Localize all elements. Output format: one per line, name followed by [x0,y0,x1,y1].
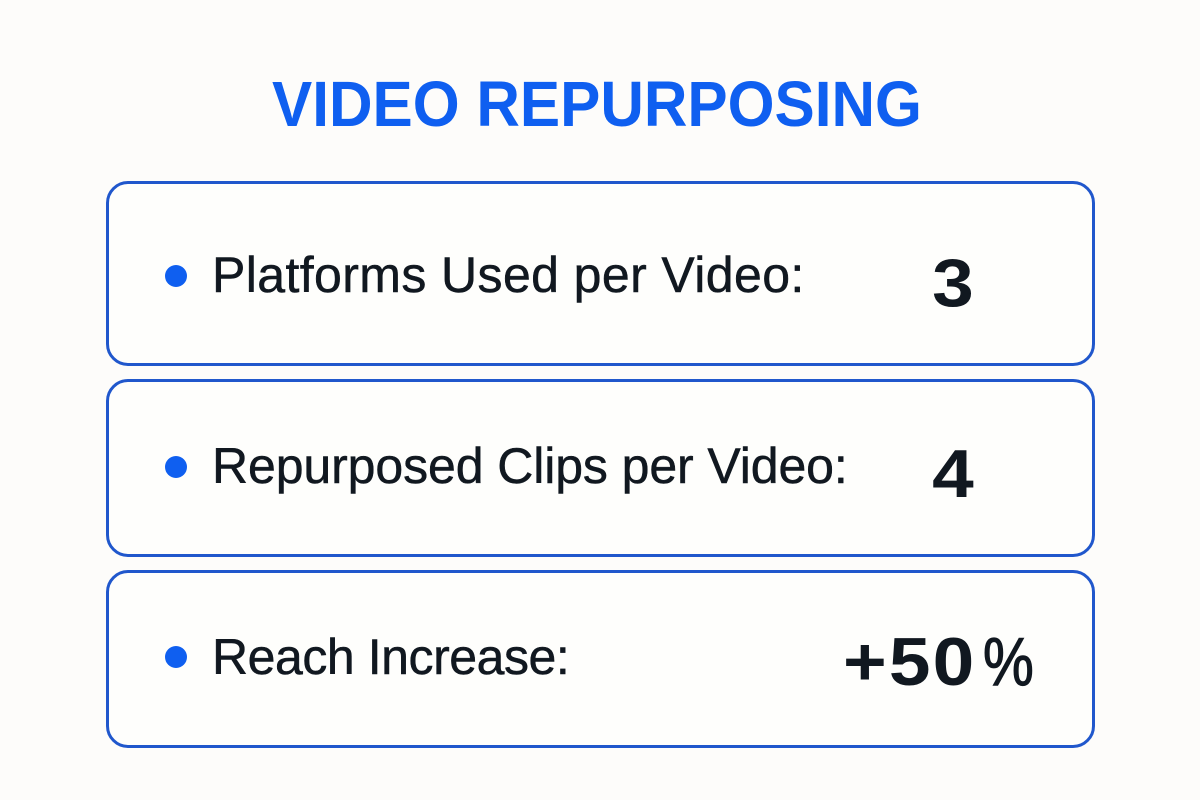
bullet: platforms [165,265,187,287]
value: reach [843,624,1034,700]
label: reach: Reach Increase: [212,629,569,685]
label: clips: Repurposed Clips per Video: [212,438,848,494]
value: reach: +50 [843,624,976,700]
bullet: clips [165,456,187,478]
title: VIDEO REPURPOSING [272,68,922,140]
value: platforms: 3 [932,245,974,321]
panel: repurposed clips per video [106,379,1095,557]
value: clips: 4 [932,436,974,512]
label: platforms: Platforms Used per Video: [212,247,805,303]
bullet: reach [165,646,187,668]
panel: platforms used per video [106,181,1095,366]
value: reach: % [983,624,1034,700]
panel: reach increase [106,570,1095,748]
